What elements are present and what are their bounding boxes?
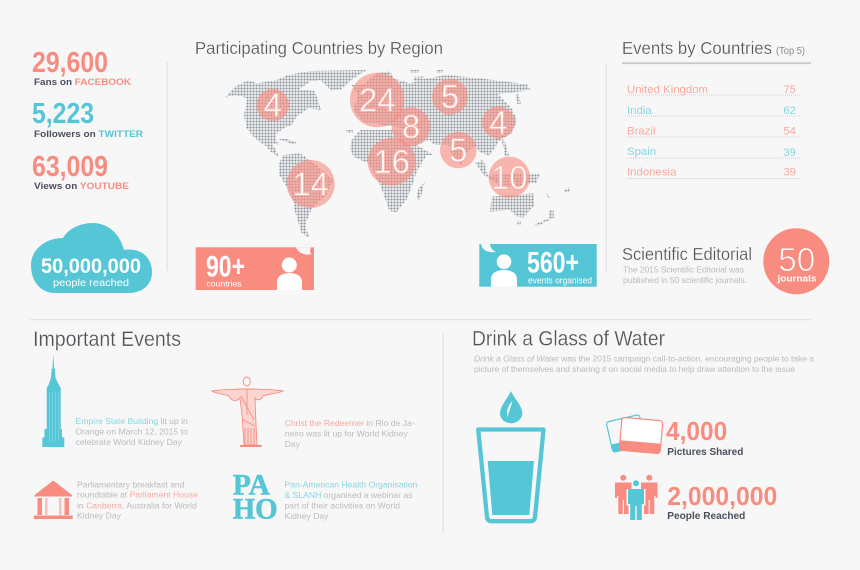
bubble: East Asia 4: 4 (489, 104, 507, 141)
bubble: North America 4 (256, 86, 289, 124)
Facebook stat (32, 47, 131, 88)
stat: pictures shared: Pictures Shared (667, 446, 743, 458)
callout: 560+ events organised: 560+ (527, 247, 579, 280)
logo: PAHO (233, 468, 278, 525)
bubble: Middle East 8: 8 (402, 108, 420, 145)
bubble: Oceania 10: 10 (491, 159, 528, 196)
icon: glass of water (478, 430, 544, 521)
heading: Important Events (33, 328, 181, 351)
icon: water drop (500, 391, 522, 423)
stat: people reached: 2,000,000 (667, 481, 777, 511)
text: Parliament House: Parliamentary breakfast and (77, 479, 185, 489)
text: PAHO: Pan-American Health Organisation (284, 480, 418, 490)
row: Indonesia: 39 (783, 166, 796, 178)
text: Empire State Building: lit up in (158, 416, 188, 426)
row: India: 62 (783, 105, 796, 117)
bubble: Europe 24: 24 (359, 82, 396, 118)
badge: 50 journals: journals (776, 274, 816, 284)
row: United Kingdom: 75 (783, 84, 796, 96)
Twitter stat: Followers on TWITTER (34, 129, 143, 140)
row: India (627, 105, 796, 117)
text: Empire State Building: celebrate World Kidney Day (76, 437, 183, 447)
text: Christ the Redeemer: neiro was lit up for World Kidney (285, 428, 408, 438)
chart: dotted world map with region bubbles (226, 70, 570, 236)
icon: Christ the Redeemer (212, 377, 283, 447)
text: Parliament House: Kidney Day (77, 511, 122, 521)
text: Parliament House: Parliament House (130, 490, 198, 500)
text: Parliament House: roundtable at (77, 490, 130, 500)
bubble: Africa 16: 16 (373, 143, 410, 180)
row: Indonesia (627, 166, 796, 178)
bubble: Russia 5: 5 (441, 78, 459, 115)
icon: Empire State Building (42, 355, 64, 447)
panel: social media stats (31, 47, 152, 293)
callout: 560+ events organised: events organised (528, 276, 592, 286)
heading: Drink a Glass of Water (472, 328, 665, 351)
callout: 90+ countries (196, 247, 314, 290)
text: Empire State Building: Empire State Building (76, 416, 158, 426)
row: Brazil (627, 126, 796, 138)
bubble: South Asia 5 (440, 132, 477, 168)
YouTube stat: Views on YOUTUBE (34, 181, 130, 192)
bubble: Africa 16 (368, 138, 416, 186)
heading note: (Top 5) (776, 46, 805, 57)
text: PAHO: Kidney Day (284, 511, 329, 521)
Facebook stat: Fans on FACEBOOK (34, 77, 131, 88)
row: India: India (627, 105, 652, 117)
Twitter stat (32, 98, 143, 140)
description: published in 50 scientific journals. (623, 275, 747, 285)
text: Parliament House: in (77, 500, 86, 510)
text: PAHO: organised a webinar as (321, 490, 413, 500)
description: The 2015 Scientific Editorial was (623, 264, 744, 274)
bubble: South America 14: 14 (292, 166, 329, 202)
bubble: North America 4: 4 (264, 86, 282, 124)
stat: pictures shared (606, 415, 743, 458)
panel: scientific editorial (622, 228, 829, 294)
bubble: East Asia 4 (482, 104, 515, 141)
text: PAHO: part of their activities on World (284, 500, 400, 510)
heading: Events by Countries (622, 38, 772, 58)
bubble: South America 14 (287, 160, 335, 208)
stat: people reached: People Reached (667, 510, 745, 522)
heading: participating countries: Participating Countries by Region (195, 38, 443, 58)
text: Christ the Redeemer: Day (285, 439, 301, 449)
panel: drink a glass of water (472, 328, 814, 522)
row: United Kingdom (627, 84, 796, 96)
heading: Scientific Editorial (622, 244, 752, 264)
row: United Kingdom: United Kingdom (627, 84, 708, 96)
row: Spain (627, 146, 796, 159)
icon: Parliament House (34, 480, 73, 519)
logo: PAHO: PA (233, 468, 270, 501)
text: Empire State Building: Orange on March 12, 2015 to (76, 426, 188, 436)
YouTube stat: 63,009 (32, 151, 108, 183)
cloud: people reached: 50,000,000 (41, 255, 141, 278)
bubble: Russia 5 (432, 78, 468, 115)
bubble: Europe 24 (350, 73, 405, 127)
description: Drink a Glass of Water was the 2015 campaign call-to-action, encouraging people to take a (474, 354, 814, 364)
row: Brazil: 54 (783, 126, 796, 138)
row: Spain: Spain (627, 146, 656, 158)
Facebook stat: 29,600 (32, 47, 108, 79)
text: Parliament House: Canberra, Australia for World (86, 500, 197, 510)
row: Indonesia: Indonesia (627, 166, 677, 178)
text: Christ the Redeemer: in Rio de Ja- (364, 418, 415, 428)
bubble: South Asia 5: 5 (449, 132, 467, 168)
stat: people reached (615, 475, 777, 522)
text: PAHO: & SLANH (284, 490, 321, 500)
cloud: people reached (31, 223, 152, 293)
panel: events by countries top 5 (622, 38, 811, 178)
Twitter stat: 5,223 (32, 98, 94, 130)
text: Christ the Redeemer: Christ the Redeemer (285, 418, 364, 428)
description: picture of themselves and sharing it on social media to help draw attention to the issue (474, 364, 795, 374)
callout: 90+ countries: 90+ (206, 251, 245, 284)
stat: pictures shared: 4,000 (666, 416, 727, 446)
bubble: Middle East 8 (392, 107, 430, 146)
row: Brazil: Brazil (627, 126, 655, 138)
cloud: people reached: people reached (53, 278, 129, 289)
callout: 90+ countries: countries (206, 279, 242, 289)
badge: 50 journals: 50 (778, 241, 815, 278)
callout: 560+ events organised (479, 244, 597, 287)
logo: PAHO: HO (233, 492, 278, 525)
row: Spain: 39 (783, 147, 796, 159)
dotted world map (226, 70, 570, 236)
panel: important events (33, 328, 418, 525)
badge: 50 journals (763, 228, 829, 294)
